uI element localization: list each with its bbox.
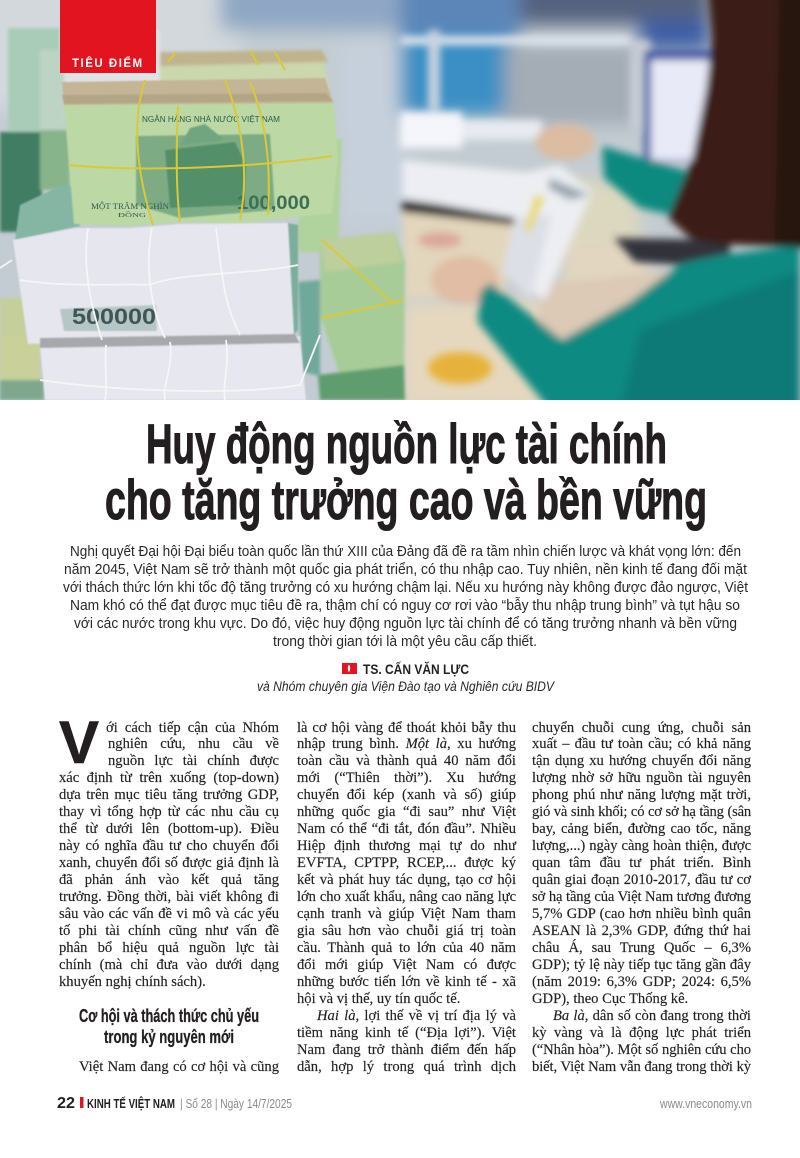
- main banknote bundle: [62, 78, 334, 108]
- body column 1 last line: Việt Nam đang có cơ hội và cũng: [79, 1058, 279, 1074]
- body column 1: dựa trên mục tiêu tăng trưởng GDP,: [59, 787, 279, 803]
- body column 3: biết, Việt Nam vẫn đang trong thời kỳ: [532, 1059, 751, 1075]
- upper glass rail: [400, 36, 630, 45]
- author byline: và Nhóm chuyên gia Viện Đào tạo và Nghiên cứu BIDV: [257, 679, 556, 694]
- white bundle: [13, 223, 296, 344]
- top of white bundle: [15, 186, 80, 240]
- body column 1: phân bổ hiệu quả nguồn lực tài: [59, 940, 279, 956]
- body column 2: những quốc gia “đi sau” như Việt: [297, 804, 516, 820]
- intro paragraph: Nam khó có thể đạt được mục tiêu đề ra, thậm chí có nguy cơ rơi vào “bẫy thu nhập trung bình” và tụt hậu so: [70, 597, 740, 614]
- intro paragraph: Nghị quyết Đại hội Đại biểu toàn quốc lần thứ XIII của Đảng đã đề ra tầm nhìn chiến lược và khát vọng lớn: đến: [70, 544, 741, 560]
- body column 3: xuất – đầu tư toàn cầu; có khả năng: [532, 736, 751, 752]
- body column 1: đã phản ánh vào kết quả tăng: [59, 872, 279, 888]
- machine body: [402, 160, 592, 300]
- body column 1: chính (mà chỉ đưa vào dưới dạng: [59, 957, 279, 973]
- body column 2: là cơ hội vàng để thoát khỏi bẫy thu: [297, 720, 516, 736]
- body column 3: (“Nhân hòa”). Một số nghiên cứu cho: [532, 1042, 751, 1058]
- body column 1: trưởng. Đồng thời, bài viết không đi: [59, 889, 279, 905]
- category tag: TIÊU ĐIỂM: [60, 0, 156, 73]
- body column 1: xanh, chuyển đổi số được giả định là: [59, 855, 279, 871]
- body column 2: đổi mới giúp Việt Nam có được: [297, 957, 516, 973]
- keyboard: [614, 238, 730, 268]
- body column 1: này có nghĩa đầu tư cho chuyển đổi: [59, 838, 279, 854]
- magazine name: KINH TẾ VIỆT NAM: [87, 1096, 175, 1111]
- category tag: TIÊU ĐIỂM: TIÊU ĐIỂM: [72, 58, 144, 70]
- body column 2: mới (“Thiên thời”). Xu hướng: [297, 770, 516, 786]
- intro paragraph: với thách thức lớn khi tốc độ tăng trưởng có xu hướng chậm lại. Nếu xu hướng này không được đảo ngược, Việt: [63, 580, 748, 596]
- body column 1: thể từ dưới lên (bottom-up). Điều: [59, 821, 279, 837]
- body column 2: Hiệp định thương mại tự do như: [297, 838, 516, 854]
- body column 1: nguồn lực tài chính được: [108, 753, 279, 769]
- hair: [668, 0, 800, 248]
- website: www.vneconomy.vn: [659, 1097, 752, 1111]
- body column 2: EVFTA, CPTPP, RCEP,... được ký: [297, 855, 516, 871]
- body column 1: tố phi tài chính cũng như vấn đề: [59, 923, 279, 939]
- body column 2: những bước tiến lớn về kinh tế - xã: [297, 974, 516, 990]
- net strings: [0, 228, 320, 400]
- body column 3: ASEAN là 2,3% GDP, đứng thứ hai: [532, 923, 751, 939]
- section heading: [79, 1006, 259, 1048]
- blurred back stacks: [60, 30, 160, 90]
- body column 2: kết và phát huy tác dụng, tạo cơ hội: [297, 872, 516, 888]
- banknote text: NGÂN HÀNG NHÀ NƯỚC VIỆT NAM: [142, 115, 280, 124]
- body column 2: nhập trung bình. Một là, xu hướng: [297, 736, 516, 752]
- intro paragraph: [63, 544, 748, 650]
- body column 3: [532, 720, 752, 1075]
- body column 1: khuyến nghị chính sách).: [59, 974, 206, 990]
- hero photo: stacks of banknotes and bank teller: [0, 0, 800, 400]
- body column 2: tiềm năng kinh tế (“Địa lợi”). Việt: [297, 1025, 516, 1041]
- body column 2: Nam đang trở thành điểm đến hấp: [297, 1042, 516, 1058]
- body column 1: nghiên cứu, nhu cầu về: [108, 736, 279, 752]
- machine tray: [402, 205, 515, 300]
- body column 3: lượng,...) ngày càng hoàn thiện, được: [532, 838, 751, 854]
- page number: 22: [57, 1095, 75, 1112]
- body column 1: [59, 720, 279, 990]
- body column 3: chuyển chuỗi cung ứng, chuỗi sản: [532, 720, 751, 736]
- section heading: trong kỷ nguyên mới: [104, 1027, 234, 1047]
- teal sleeve: [602, 146, 690, 215]
- body column 3: GDP); tỷ lệ này tiếp tục tăng gần đây: [532, 957, 751, 973]
- body column 2: hội và vị thế, uy tín quốc tế.: [297, 991, 460, 1007]
- body column 3: quân giai đoạn 2010-2017, đầu tư cơ: [532, 872, 751, 888]
- body column 3: quan tâm đầu tư phát triển. Bình: [532, 855, 751, 871]
- body column 1: sâu vào các vấn đề vi mô và các yếu: [59, 906, 279, 922]
- title: [105, 412, 707, 531]
- body column 1: xác định từ trên xuống (top-down): [59, 770, 279, 786]
- drop cap V: V: [59, 709, 99, 776]
- author byline: TS. CẤN VĂN LỰC: [363, 662, 469, 677]
- body column 3: sở hạ tầng của Việt Nam tương đương: [532, 889, 751, 905]
- rubber bands: [68, 50, 404, 318]
- body column 2: Hai là, lợi thế về vị trí địa lý và: [317, 1008, 516, 1024]
- body column 2: dẫn, hợp lý trong quá trình dịch: [297, 1059, 516, 1075]
- body column 2: chuyển đổi kép (xanh và số) giúp: [297, 787, 516, 803]
- author byline: [257, 662, 556, 694]
- banknote text: MỘT TRĂM NGHÌN: [91, 201, 169, 211]
- body column 3: lượng nhờ sở hữu nguồn tài nguyên: [532, 770, 751, 786]
- monitor: [644, 50, 710, 162]
- body column 3: GDP), theo Cục Thống kê.: [532, 991, 688, 1007]
- body column 2: cạnh tranh và giúp Việt Nam tham: [297, 906, 516, 922]
- body column 3: phong phú như năng lượng mặt trời,: [532, 787, 751, 803]
- stain on desk: [428, 352, 492, 384]
- issue and date: | Số 28 | Ngày 14/7/2025: [180, 1097, 292, 1111]
- body column 3: 5,7% GDP (cao hơn nhiều bình quân: [532, 906, 751, 922]
- body column 2: toàn cầu và thành quả 40 năm đổi: [297, 753, 516, 769]
- body column 3: bay, cảng biển, đường cao tốc, năng: [532, 821, 751, 837]
- body column 3: (năm 2019: 6,3% GDP; 2024: 6,5%: [532, 974, 751, 990]
- body column 3: kỳ vàng và là động lực phát triển: [532, 1025, 751, 1041]
- desk papers: [540, 270, 680, 348]
- hands: [535, 124, 595, 160]
- icon: red author marker: [342, 663, 357, 674]
- banknote text: 500000: [72, 304, 156, 329]
- body column 3: gió và sinh khối; có cơ sở hạ tầng (sân: [532, 804, 751, 820]
- body column 2: Nam có thể “đi tắt, đón đầu”. Nhiều: [297, 821, 516, 837]
- body column 1: ới cách tiếp cận của Nhóm: [106, 720, 279, 736]
- body column 2: gia sâu hơn vào chuỗi giá trị toàn: [297, 923, 516, 939]
- intro paragraph: năm 2045, Việt Nam sẽ trở thành một quốc gia phát triển, có thu nhập cao. Tuy nhiên, nền kinh tế đang đối mặt: [64, 562, 747, 578]
- intro paragraph: với các nước trong khu vực. Do đó, việc huy động nguồn lực tài chính để có tăng trưởng nhanh và bền vững: [74, 616, 737, 632]
- intro paragraph: trong thời gian tới là một yêu cầu cấp thiết.: [273, 634, 537, 650]
- banknote text: ĐỒNG: [118, 211, 147, 219]
- banknote text: 100,000: [237, 193, 310, 214]
- body column 3: tận dụng xu hướng chuyển đổi năng: [532, 753, 751, 769]
- body column 3: Ba là, dân số còn đang trong thời: [553, 1008, 751, 1024]
- body column 1: thay vì tổng hợp từ các nhu cầu cụ: [59, 804, 279, 820]
- body column 2: cầu. Thành quả to lớn của 40 năm: [297, 940, 516, 956]
- body column 2: [297, 720, 516, 1075]
- label on white bundle: [60, 305, 157, 331]
- body column 2: lớn cho xuất khẩu, nâng cao năng lực: [297, 889, 516, 905]
- banknote text: [72, 115, 310, 329]
- body column 3: châu Á, sau Trung Quốc – 6,3%: [532, 940, 751, 956]
- footer red bar: [80, 1097, 84, 1108]
